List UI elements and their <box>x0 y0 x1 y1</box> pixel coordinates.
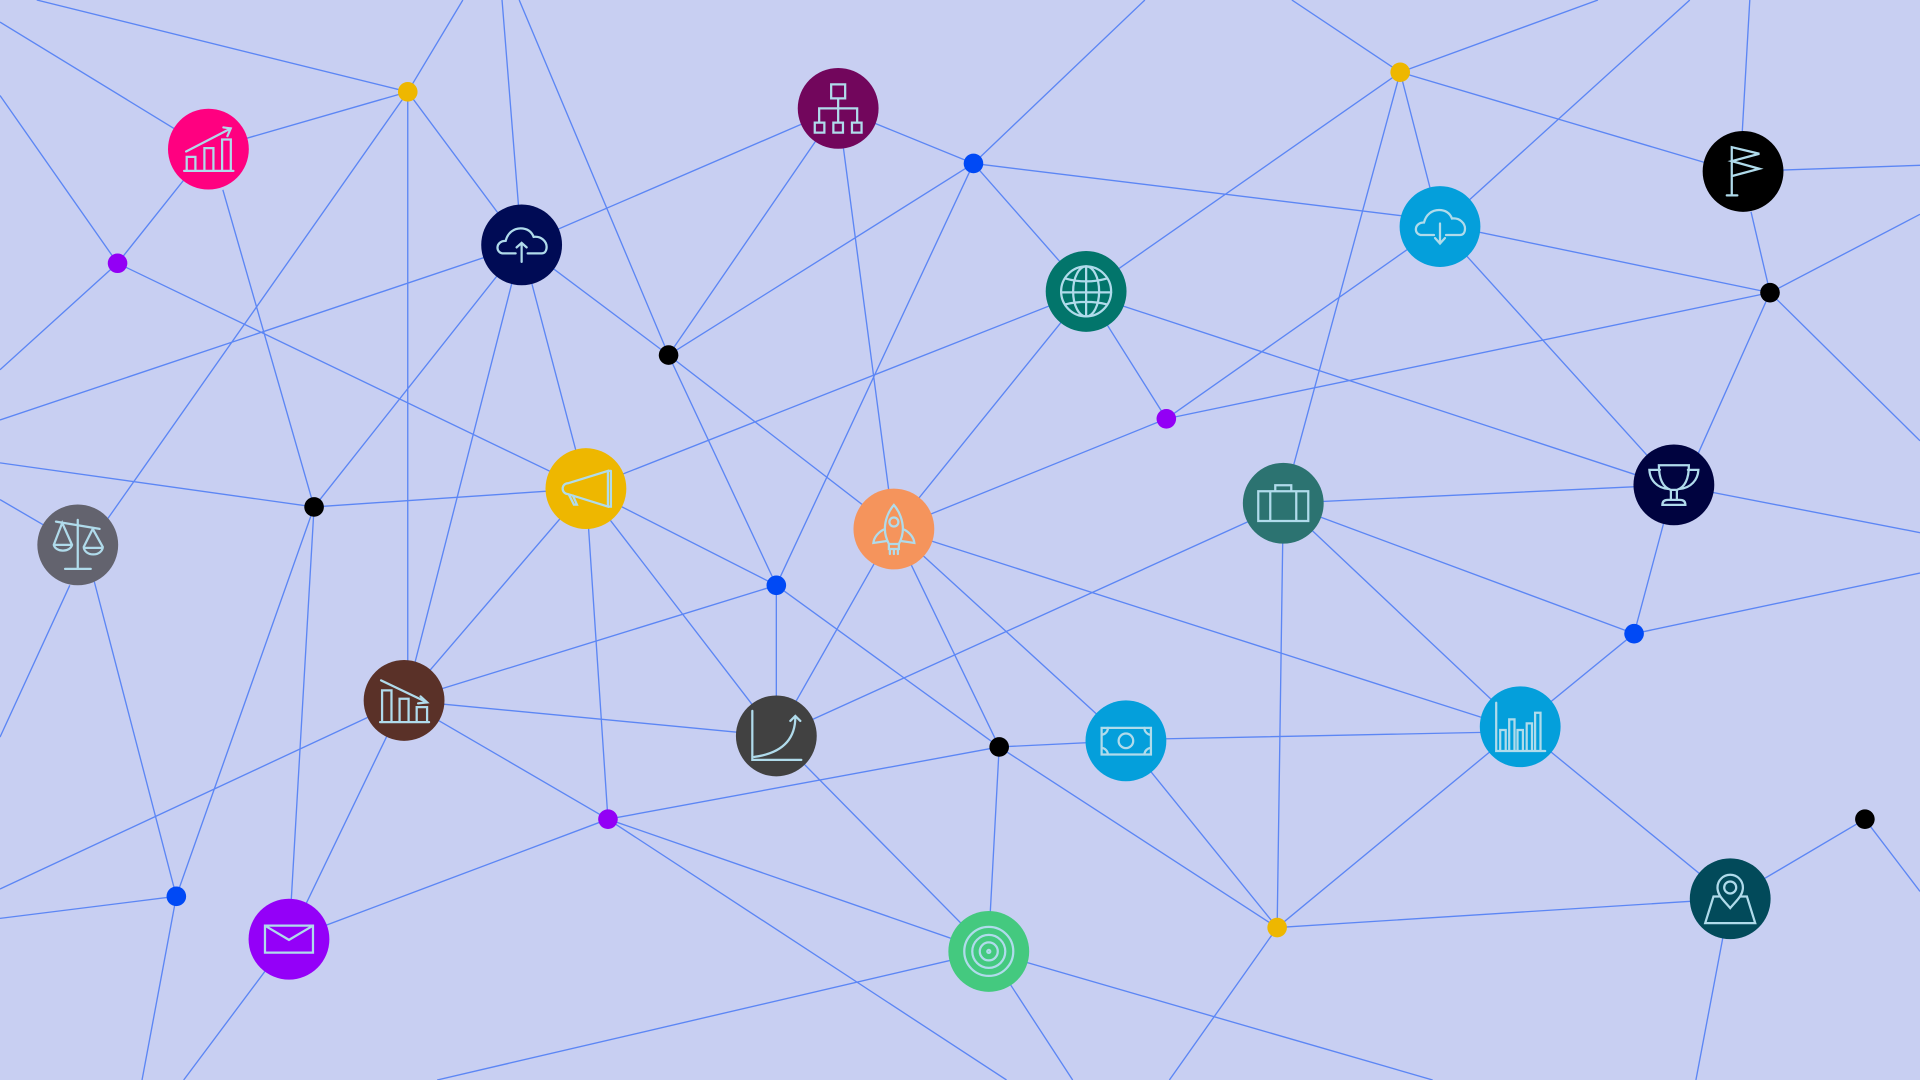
node: yellow dot top left <box>398 82 418 102</box>
icon: banknote <box>1086 700 1166 781</box>
icon: target <box>948 911 1029 992</box>
icon: declining bar chart <box>364 660 444 741</box>
icon: rocket <box>853 489 934 569</box>
icon: trophy <box>1633 444 1714 525</box>
icon: organisation chart <box>798 68 879 149</box>
icon: map pin <box>1690 858 1771 939</box>
node: violet dot centre right <box>1157 409 1176 429</box>
icon: growth bar chart <box>168 109 249 190</box>
node: black dot left <box>304 497 324 517</box>
icon: briefcase <box>1243 463 1324 544</box>
node: black dot upper centre <box>659 345 678 365</box>
icon: envelope <box>249 899 329 980</box>
icon: cloud download <box>1400 186 1480 267</box>
node: blue dot centre <box>767 576 786 595</box>
icon: growth curve <box>736 696 817 776</box>
icon: megaphone <box>546 448 626 529</box>
icon: column chart <box>1480 686 1561 767</box>
node: blue dot bottom left <box>167 887 186 906</box>
icon: globe <box>1046 251 1127 332</box>
icon: balance scale <box>37 504 118 585</box>
node: violet dot bottom <box>598 809 618 829</box>
node: blue dot top <box>964 154 983 173</box>
node: blue dot right <box>1624 624 1644 643</box>
node: black dot right <box>1760 283 1780 302</box>
icon: flag <box>1703 131 1783 212</box>
node: yellow dot bottom <box>1267 918 1287 937</box>
node: black dot far right <box>1855 809 1875 829</box>
node: yellow dot top right <box>1390 62 1410 82</box>
icon: cloud upload <box>481 204 562 285</box>
node: violet dot left <box>108 253 127 273</box>
node: black dot lower centre <box>989 737 1009 757</box>
